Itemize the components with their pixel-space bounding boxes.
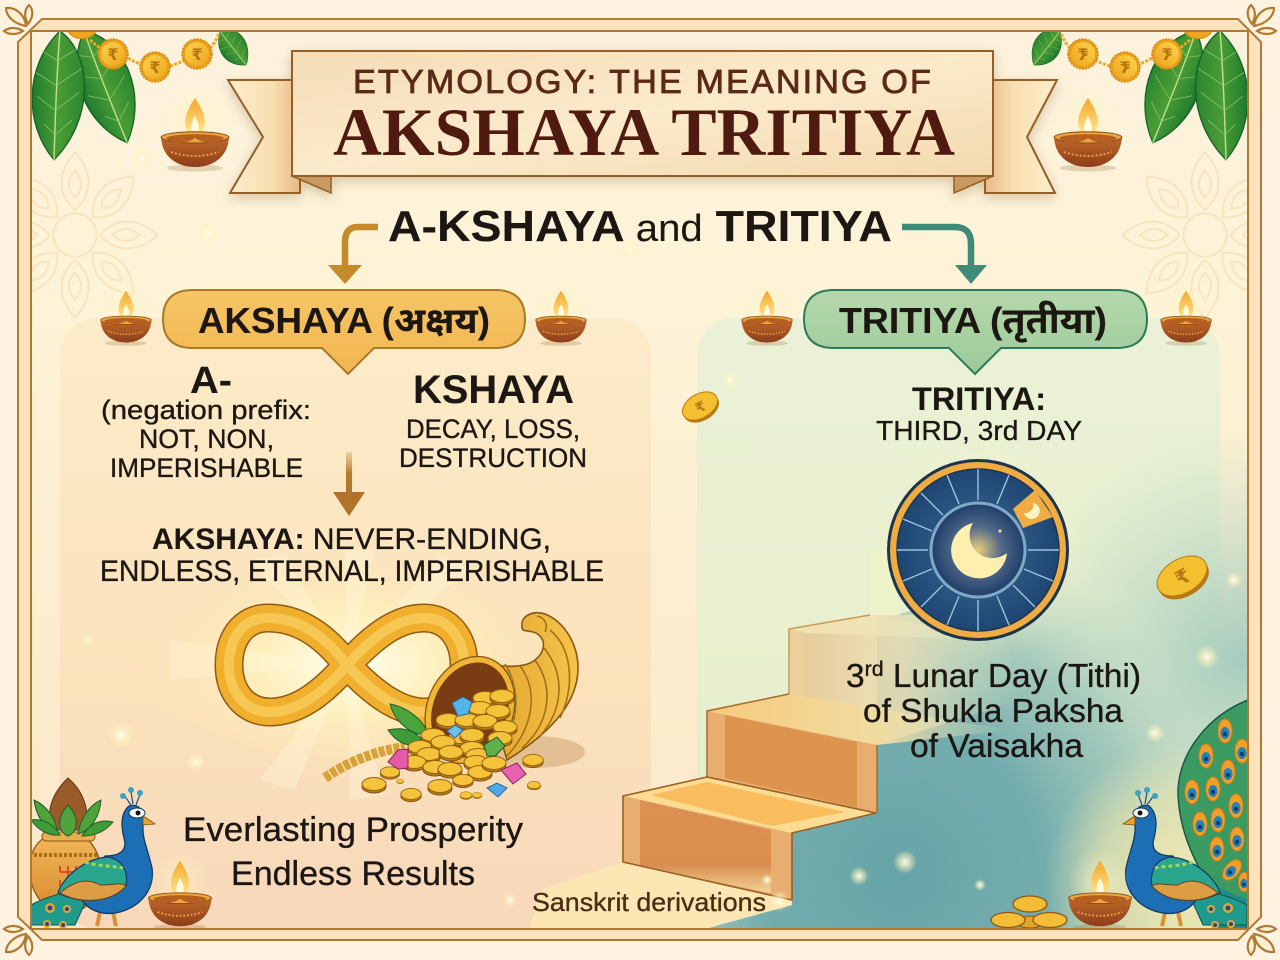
text: akshaya meaning: AKSHAYA: NEVER-ENDING,	[152, 523, 551, 556]
arrow: to akshaya	[328, 227, 378, 284]
text: akshaya meaning	[100, 523, 604, 588]
garland right with leaves and coins	[1022, 21, 1248, 160]
icon: diya top right	[1054, 85, 1122, 172]
icon: diya pill 4	[1160, 281, 1212, 346]
title line 2: AKSHAYA TRITIYA	[333, 94, 955, 170]
glow behind infinity	[145, 550, 555, 800]
gems	[452, 697, 472, 716]
corner ornament bottom right	[1248, 926, 1276, 955]
leaves	[390, 704, 428, 735]
coin pile	[362, 690, 543, 802]
text: tritiya meaning: THIRD, 3rd DAY	[876, 415, 1082, 446]
title banner	[228, 51, 1057, 193]
floating coin 1: ₹	[692, 397, 709, 416]
wheat	[325, 747, 405, 778]
text: a- prefix: A-	[190, 360, 232, 402]
pill: tritiya	[804, 290, 1147, 374]
text: kshaya	[399, 368, 587, 473]
folds	[292, 176, 331, 193]
icon: peacock left	[31, 787, 155, 929]
arrow: down	[333, 452, 365, 516]
text: tritiya meaning	[876, 381, 1082, 446]
banner plate	[292, 51, 993, 176]
text: a- prefix: IMPERISHABLE	[110, 453, 303, 483]
step b	[707, 694, 1010, 745]
icon: diya bottom right	[1068, 848, 1132, 931]
icon: peacock right	[1123, 787, 1247, 929]
icon: kalash pot	[29, 778, 113, 908]
corner ornament top right	[1248, 5, 1276, 34]
text: everlasting prosperity: Endless Results	[231, 855, 475, 893]
faint upper step	[870, 550, 900, 615]
icon: diya pill 2	[536, 281, 586, 346]
pill label: AKSHAYA (अक्षय)	[198, 300, 490, 341]
icon: diya top left	[161, 85, 229, 172]
text: lunar day: of Vaisakha	[910, 727, 1084, 764]
step c	[623, 777, 876, 833]
step a	[789, 615, 1020, 745]
ribbon left	[228, 80, 300, 193]
panel: akshaya	[60, 318, 651, 929]
text: kshaya: KSHAYA	[413, 368, 574, 412]
floor	[530, 862, 792, 928]
floating coin 2: ₹	[1171, 565, 1195, 591]
highlighted third day	[1013, 490, 1053, 528]
corner ornament bottom left	[4, 926, 32, 955]
arrow: to tritiya	[902, 227, 987, 284]
staircase	[530, 550, 1020, 928]
mandala left	[32, 151, 159, 319]
text: lunar day: rd	[865, 658, 884, 681]
icon: diya pill 1	[100, 281, 152, 346]
text: lunar day: Lunar Day (Tithi)	[884, 657, 1141, 694]
icon: infinity symbol	[229, 618, 464, 712]
text: tritiya meaning: TRITIYA:	[912, 381, 1046, 417]
text: lunar day: of Shukla Paksha	[863, 692, 1124, 729]
ribbon right	[985, 80, 1057, 193]
icon: diya pill 3	[742, 281, 792, 346]
floating coin 2	[1150, 548, 1216, 608]
text: a- prefix: NOT, NON,	[139, 424, 274, 454]
icon: cornucopia with coins and gems	[325, 613, 585, 802]
title line 1: ETYMOLOGY: THE MEANING OF	[353, 63, 933, 100]
text: lunar day	[846, 657, 1141, 764]
text: lunar day: 3	[846, 657, 864, 694]
garland left with leaves and coins	[32, 21, 258, 160]
text: everlasting prosperity: Everlasting Prosperity	[183, 811, 523, 849]
icon: diya bottom left	[148, 848, 212, 931]
mandala right	[1121, 151, 1247, 318]
icon: lunar wheel	[868, 440, 1088, 660]
icon: peacock tail right	[1178, 700, 1250, 928]
text: kshaya: DECAY, LOSS,	[406, 414, 580, 444]
text: kshaya: DESTRUCTION	[399, 443, 587, 473]
corner ornament top left	[4, 5, 32, 34]
text: a- prefix	[101, 360, 311, 483]
pill: akshaya	[163, 290, 525, 374]
floating coin 1	[678, 386, 724, 428]
icon: coin stack	[991, 896, 1067, 928]
heading: A-KSHAYA and TRITIYA	[388, 202, 892, 251]
text: a- prefix: (negation prefix:	[101, 395, 311, 425]
sparkles	[81, 147, 1242, 912]
panel: tritiya	[697, 318, 1248, 929]
text: akshaya meaning: ENDLESS, ETERNAL, IMPERISHABLE	[100, 555, 604, 588]
caption: Sanskrit derivations	[532, 887, 766, 917]
pill label: TRITIYA (तृतीया)	[839, 300, 1107, 344]
text: everlasting prosperity	[183, 811, 523, 893]
